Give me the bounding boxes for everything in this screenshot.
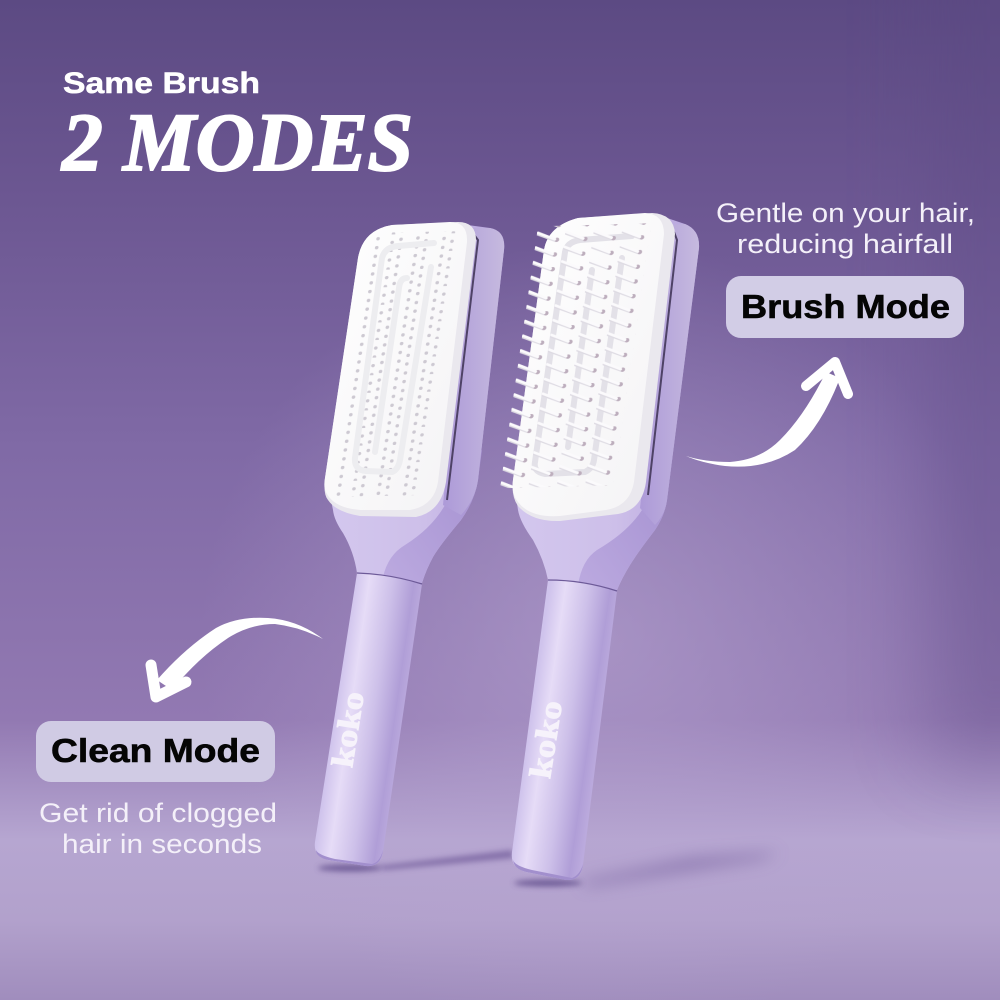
neck shaded face: [578, 460, 672, 590]
arrow: to clean mode: [151, 618, 323, 697]
handle joint line: [357, 573, 422, 584]
heading: same brush: Same Brush: [63, 67, 260, 100]
brush back plate and neck: [515, 214, 699, 590]
cleaning pad: [324, 222, 476, 517]
logo: koko: koko: [324, 689, 371, 770]
back plate side: [640, 224, 699, 525]
brush back plate and neck: [330, 224, 504, 583]
text: clean mode description: hair in seconds: [62, 829, 262, 859]
neck shaded face: [383, 450, 482, 583]
text: clean mode description: [39, 798, 277, 859]
text: clean mode description: Get rid of clogged: [39, 798, 277, 828]
arrow: to brush mode: [686, 362, 848, 467]
pad channels: [535, 236, 632, 474]
text: brush mode description: reducing hairfall: [737, 229, 953, 259]
label: clean mode: Clean Mode: [51, 732, 260, 769]
brush: clean mode: [315, 222, 504, 866]
pad front face: [324, 222, 467, 510]
handle: [512, 580, 617, 880]
bristles: [500, 223, 651, 488]
text: brush mode description: Gentle on your hair,: [716, 198, 975, 228]
handle joint line: [548, 580, 617, 591]
back plate side: [443, 228, 504, 515]
pad front face: [513, 213, 664, 516]
brush: brush mode: [500, 213, 699, 880]
label: brush mode: Brush Mode: [741, 288, 950, 325]
handle base lip: [316, 850, 383, 866]
pad channel: [355, 243, 434, 472]
bristle pad: [513, 213, 675, 521]
logo: koko: koko: [522, 698, 569, 781]
pad dark gap: [447, 232, 478, 500]
handle base lip: [513, 860, 583, 880]
heading: 2 modes: 2 MODES: [60, 96, 413, 188]
handle: [315, 573, 422, 866]
label: clean mode: [36, 721, 275, 782]
text: brush mode description: [716, 198, 975, 259]
label: brush mode: [726, 276, 964, 338]
pad holes: [325, 231, 466, 497]
floor shadows: [318, 850, 780, 886]
pad dark gap: [648, 232, 677, 495]
